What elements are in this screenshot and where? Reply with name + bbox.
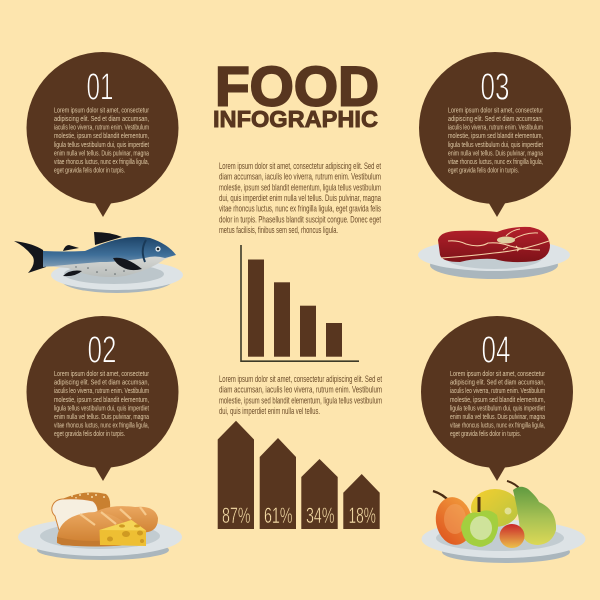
intro text block: diam accumsan, iaculis leo viverra, rutrum enim. Vestibulum (219, 171, 381, 182)
panel 02: speech bubble: iaculis leo viverra, rutrum enim. Vestibulum (54, 388, 149, 395)
panel 01: speech bubble: adipiscing elit. Sed et diam accumsan, (54, 116, 149, 123)
title: INFOGRAPHIC (213, 106, 378, 132)
panel 01: speech bubble: 01 (86, 66, 114, 108)
panel 01: speech bubble: molestie, ipsum sed blandit elementum, (54, 133, 149, 140)
bar chart (241, 245, 359, 361)
panel 04: speech bubble: iaculis leo viverra, rutrum enim. Vestibulum (450, 388, 545, 395)
arrow bar chart with percentages: 87% (222, 503, 250, 528)
icon: fish on plate (14, 232, 183, 293)
panel 03: speech bubble: Lorem ipsum dolor sit amet, consectetur (448, 108, 544, 114)
second text block: Lorem ipsum dolor sit amet, consectetur adipiscing elit. Sed et (219, 373, 382, 384)
panel 03: speech bubble: enim nulla vel tellus. Duis pulvinar, magna (448, 150, 543, 157)
panel 04: speech bubble: adipiscing elit. Sed et diam accumsan, (450, 380, 545, 387)
intro text block: dui, quis imperdiet enim nulla vel tellus. Duis pulvinar, magna (219, 192, 381, 203)
panel 02: speech bubble: molestie, ipsum sed blandit elementum, (54, 397, 149, 404)
panel 01: speech bubble: eget gravida felis dolor in turpis. (54, 168, 125, 175)
arrow bar chart with percentages (218, 421, 380, 529)
title: FOOD (215, 54, 379, 118)
panel 03: speech bubble (419, 52, 571, 217)
panel 02: speech bubble: vitae rhoncus luctus, nunc ex fringilla ligula, (54, 423, 149, 430)
panel 03: speech bubble: molestie, ipsum sed blandit elementum, (448, 133, 543, 140)
panel 03: speech bubble: adipiscing elit. Sed et diam accumsan, (448, 116, 543, 123)
panel 03: speech bubble: 03 (480, 66, 510, 108)
panel 04: speech bubble: ligula tellus vestibulum dui, quis imperdiet (450, 405, 545, 412)
panel 01: speech bubble: enim nulla vel tellus. Duis pulvinar, magna (54, 150, 149, 157)
arrow bar chart with percentages: 34% (306, 503, 334, 528)
panel 03: speech bubble: ligula tellus vestibulum dui, quis imperdiet (448, 142, 543, 149)
second text block: dui, quis imperdiet enim nulla vel tellus. (219, 405, 320, 416)
intro text block: metus facilisis, finibus sem sed, rhoncus ligula. (219, 224, 338, 235)
icon: steak on plate (418, 227, 570, 279)
second text block: diam accumsan, iaculis leo viverra, rutrum enim. Vestibulum (219, 384, 382, 395)
intro text block (219, 160, 381, 235)
panel 02: speech bubble: 02 (88, 330, 116, 372)
panel 04: speech bubble: Lorem ipsum dolor sit amet, consectetur (450, 371, 546, 378)
panel 03: speech bubble: vitae rhoncus luctus, nunc ex fringilla ligula, (448, 159, 543, 166)
panel 01: speech bubble: iaculis leo viverra, rutrum enim. Vestibulum (54, 125, 149, 132)
intro text block: vitae rhoncus luctus, nunc ex fringilla ligula, eget gravida felis (219, 203, 381, 214)
intro text block: Lorem ipsum dolor sit amet, consectetur adipiscing elit. Sed et (219, 160, 381, 171)
panel 04: speech bubble: molestie, ipsum sed blandit elementum, (450, 397, 545, 404)
panel 04: speech bubble: vitae rhoncus luctus, nunc ex fringilla ligula, (450, 423, 545, 430)
panel 02: speech bubble: ligula tellus vestibulum dui, quis imperdiet (54, 405, 149, 412)
panel 03: speech bubble: eget gravida felis dolor in turpis. (448, 168, 519, 175)
icon: bread and cheese on plate (18, 492, 182, 560)
panel 01: speech bubble: Lorem ipsum dolor sit amet, consectetur (54, 108, 150, 114)
panel 01: speech bubble (26, 52, 178, 217)
panel 04: speech bubble: eget gravida felis dolor in turpis. (450, 431, 521, 438)
panel 02: speech bubble: enim nulla vel tellus. Duis pulvinar, magna (54, 414, 149, 421)
panel 02: speech bubble: eget gravida felis dolor in turpis. (54, 431, 125, 438)
panel 03: speech bubble: iaculis leo viverra, rutrum enim. Vestibulum (448, 125, 543, 132)
panel 02: speech bubble (26, 316, 178, 481)
panel 01: speech bubble: vitae rhoncus luctus, nunc ex fringilla ligula, (54, 159, 149, 166)
panel 02: speech bubble: Lorem ipsum dolor sit amet, consectetur (54, 371, 150, 378)
arrow bar chart with percentages: 61% (264, 503, 292, 528)
panel 04: speech bubble (421, 316, 573, 481)
panel 01: speech bubble: ligula tellus vestibulum dui, quis imperdiet (54, 142, 149, 149)
second text block (219, 373, 382, 416)
icon: fruit on plate (422, 481, 586, 563)
panel 04: speech bubble: 04 (482, 330, 510, 372)
second text block: molestie, ipsum sed blandit elementum, ligula tellus vestibulum (219, 394, 382, 405)
panel 02: speech bubble: adipiscing elit. Sed et diam accumsan, (54, 380, 149, 387)
intro text block: molestie, ipsum sed blandit elementum, ligula tellus vestibulum (219, 181, 381, 192)
intro text block: dolor in turpis. Phasellus blandit suscipit congue. Donec eget (219, 213, 381, 224)
panel 04: speech bubble: enim nulla vel tellus. Duis pulvinar, magna (450, 414, 545, 421)
arrow bar chart with percentages: 18% (348, 503, 376, 528)
